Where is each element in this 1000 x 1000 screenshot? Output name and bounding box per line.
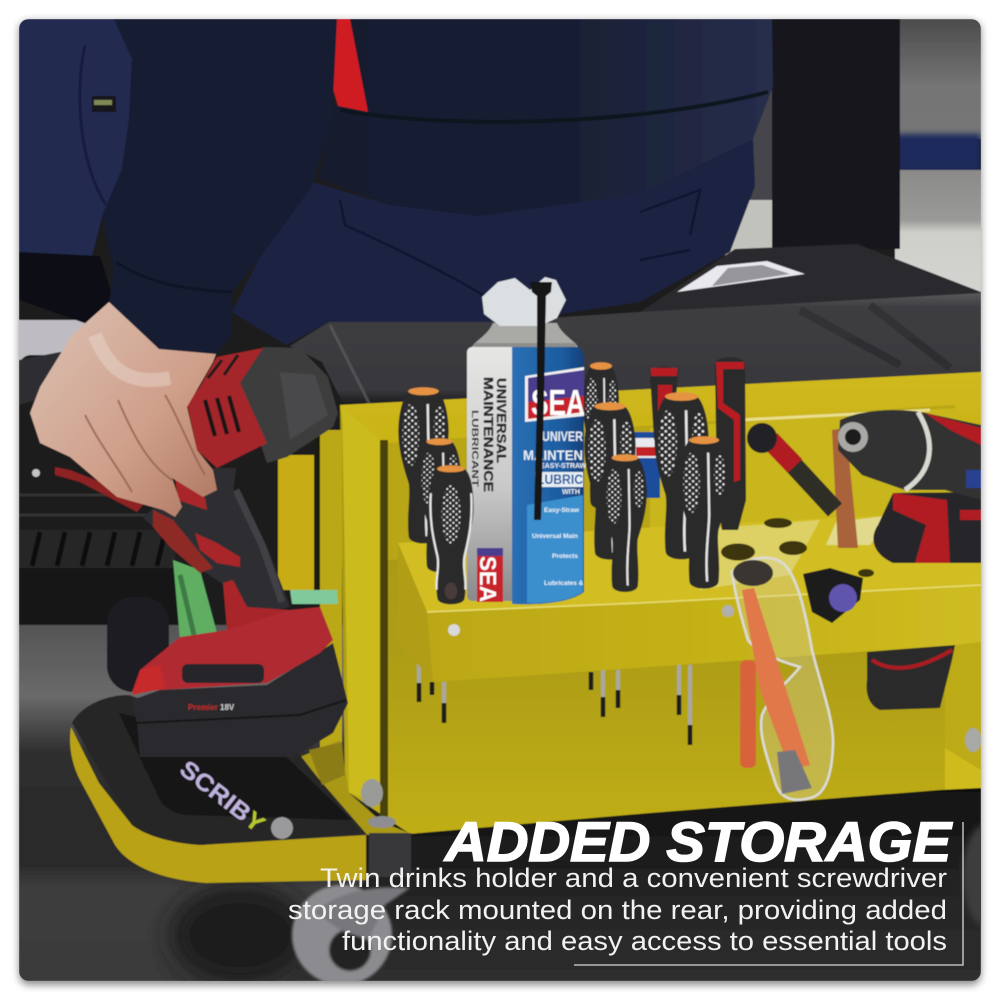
hoodie torso bbox=[319, 19, 773, 216]
rack holes bbox=[721, 518, 874, 577]
tyre behind stool bbox=[19, 352, 178, 621]
red undershirt bbox=[332, 19, 368, 112]
can instructions: Lubricates & bbox=[544, 580, 584, 587]
can side text: UNIVERSAL bbox=[494, 378, 509, 463]
tray inner panel bbox=[119, 713, 352, 820]
green clamp bbox=[173, 560, 217, 640]
bottom dark undercarriage bbox=[285, 788, 981, 981]
right side post bbox=[944, 642, 981, 790]
description text: Twin drinks holder and a convenient screwdriver bbox=[320, 863, 947, 893]
shadow under leg bbox=[19, 252, 114, 325]
trouser pocket line and label bbox=[80, 45, 116, 205]
nozzle bbox=[482, 277, 566, 326]
drill flames bbox=[153, 510, 213, 573]
can instructions: Universal Main bbox=[532, 533, 578, 540]
small rear wheel bbox=[107, 597, 169, 692]
angled tool on rack bbox=[747, 423, 835, 510]
battery brand: Premier 18V bbox=[188, 703, 235, 712]
screwdriver handles front row bbox=[428, 454, 647, 604]
hoodie sleeve bbox=[102, 19, 337, 354]
drill grip bbox=[873, 492, 981, 563]
tray bolt bbox=[271, 817, 293, 839]
description text: storage rack mounted on the rear, providing added bbox=[288, 895, 947, 925]
right cordless drill bbox=[832, 410, 981, 563]
battery black base bbox=[132, 643, 348, 757]
can instructions: Easy-Straw bbox=[544, 507, 580, 514]
hand-held cordless drill bbox=[32, 347, 348, 757]
can front text: WITH bbox=[562, 489, 580, 496]
drill grip bbox=[143, 468, 290, 617]
grip base red bbox=[223, 580, 290, 630]
can logo bbox=[525, 367, 585, 423]
drill nose bbox=[55, 467, 147, 512]
trouser leg left bbox=[19, 19, 132, 256]
can front text: LUBRIC bbox=[537, 471, 583, 487]
seat pad bbox=[290, 244, 981, 407]
drill red vent bbox=[187, 348, 267, 468]
can bottom logo: SEA bbox=[475, 556, 501, 602]
can front text: UNIVER bbox=[542, 428, 583, 444]
drill chuck bbox=[838, 422, 868, 452]
battery red top bbox=[132, 607, 333, 692]
can instructions bbox=[532, 507, 584, 587]
can side text: MAINTENANCE bbox=[481, 377, 496, 492]
screwdriver handles back row bbox=[398, 362, 709, 559]
description text: functionality and easy access to essential tools bbox=[342, 926, 947, 956]
black straw strap bbox=[530, 282, 552, 520]
screwdriver handles mid row bbox=[418, 402, 729, 589]
foot tray bbox=[70, 695, 366, 883]
seat logo bbox=[677, 261, 805, 292]
battery handle slot bbox=[182, 664, 264, 683]
copper tool bbox=[832, 428, 858, 548]
can instructions: Protects bbox=[552, 553, 578, 560]
can side text bbox=[470, 377, 509, 492]
safety glasses bbox=[732, 558, 833, 800]
caster wheel bbox=[292, 885, 410, 985]
tray black top bbox=[72, 695, 361, 845]
bolts and bracket bbox=[361, 728, 981, 877]
tray plate bbox=[309, 742, 345, 785]
can side text: LUBRICANT bbox=[470, 410, 480, 488]
aerosol can bbox=[467, 277, 587, 604]
tray yellow rim bbox=[70, 727, 366, 883]
hand bbox=[30, 302, 217, 517]
can dome bbox=[472, 323, 578, 347]
stool yellow frame bbox=[278, 372, 981, 837]
can front text: MAINTEN bbox=[523, 447, 583, 463]
can logo: SEA bbox=[531, 382, 585, 423]
blue card behind tools bbox=[632, 432, 660, 498]
right blurred caster bbox=[963, 825, 1000, 925]
spare battery bbox=[867, 645, 955, 710]
drill rear rubber bbox=[240, 347, 338, 463]
screwdriver blades under rack bbox=[419, 593, 690, 745]
title: ADDED STORAGE bbox=[443, 810, 953, 873]
tray brand text: SCRIBY bbox=[174, 755, 270, 838]
can front text bbox=[523, 428, 587, 496]
rear red handle tools bbox=[650, 357, 746, 530]
rack shelf bbox=[397, 514, 981, 682]
torch bbox=[803, 568, 863, 623]
drill body bbox=[838, 410, 981, 500]
trousers bbox=[232, 139, 755, 345]
description text bbox=[288, 863, 947, 956]
can front text: EASY-STRAW bbox=[540, 463, 587, 470]
corner bracket line bbox=[574, 822, 963, 965]
